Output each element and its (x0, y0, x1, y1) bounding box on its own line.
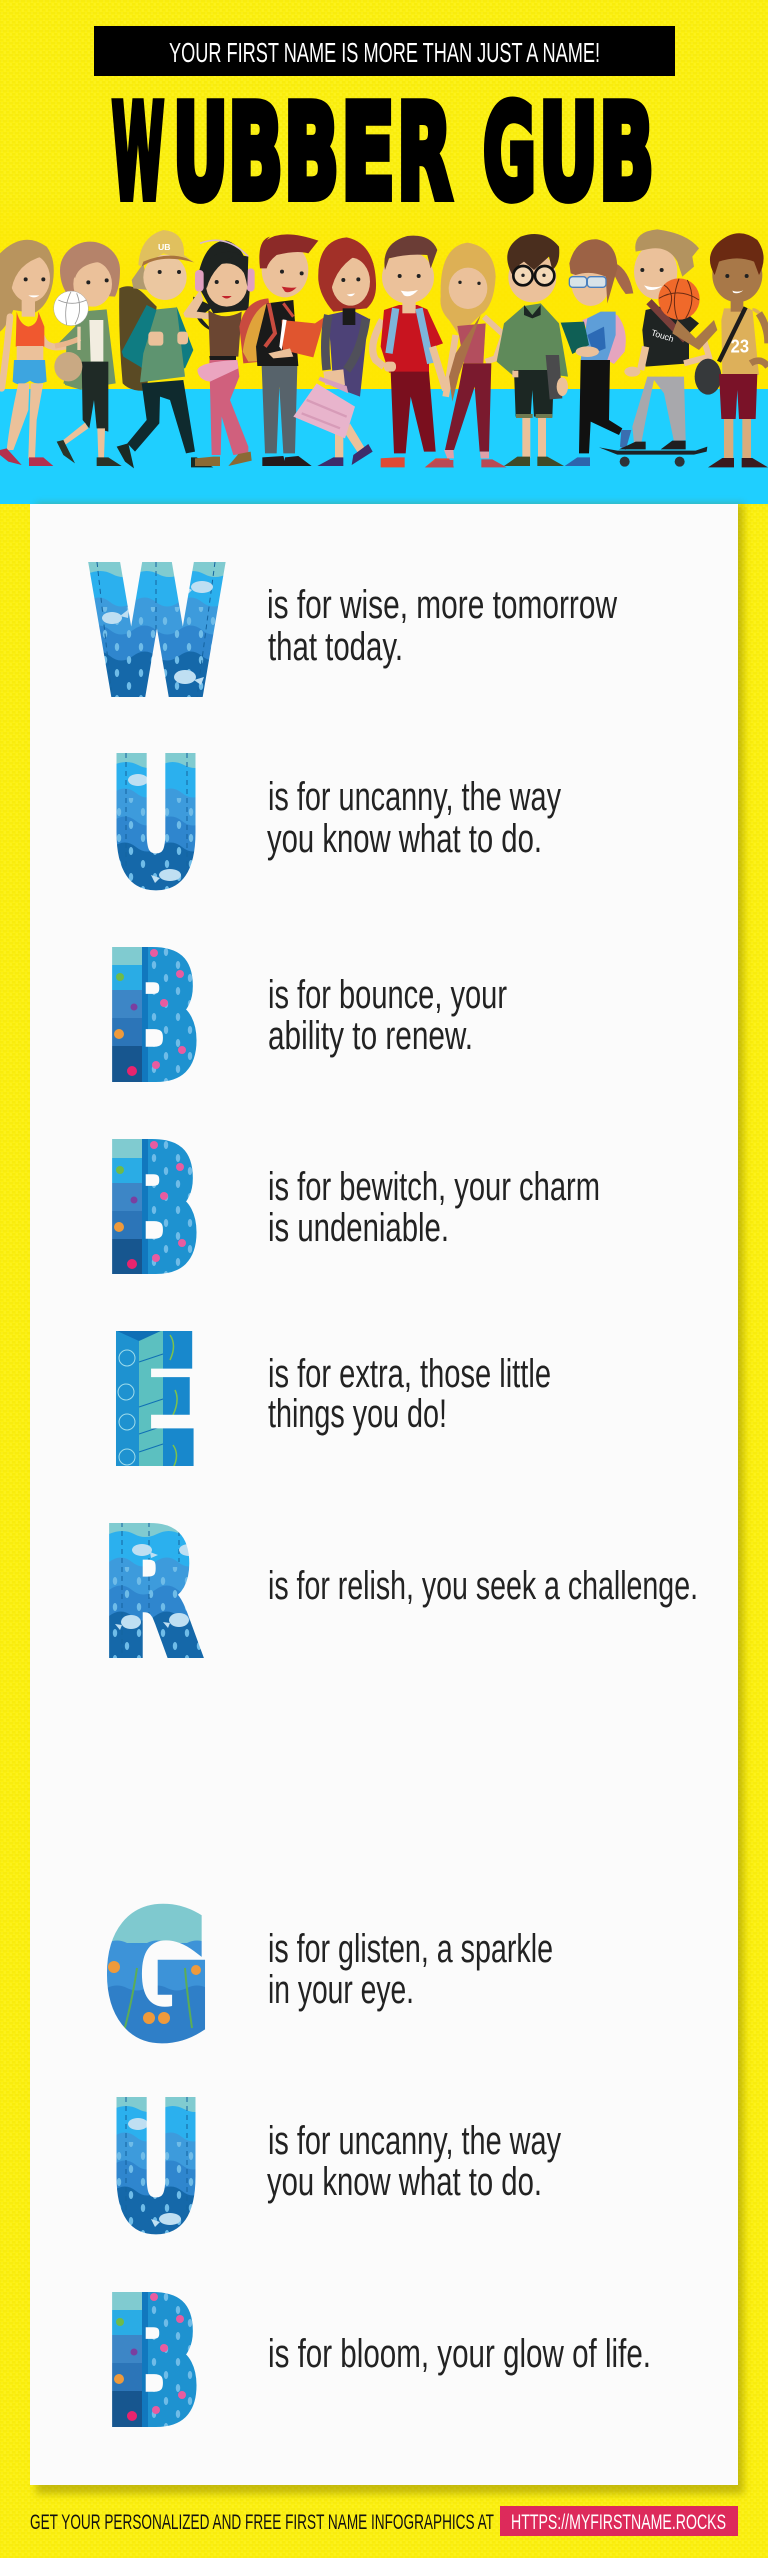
text G: is for glisten, a sparkle (268, 1927, 553, 1971)
letter R (109, 1522, 205, 1662)
row: B (112, 2290, 651, 2430)
text U (267, 775, 561, 861)
text G: in your eye. (268, 1968, 414, 2012)
row: U (113, 753, 561, 893)
text E: things you do! (268, 1392, 447, 1436)
person 7 to 12: Touch (650, 327, 675, 344)
title: R (397, 76, 452, 228)
letter G (107, 1903, 207, 2047)
person 1 to 6 (0, 230, 376, 468)
text W: is for wise, more tomorrow (267, 583, 617, 627)
letter U (116, 753, 196, 890)
person 1 to 6: UB (158, 242, 171, 252)
text U (267, 2119, 561, 2204)
text U: is for uncanny, the way (268, 2119, 561, 2163)
letter B (112, 945, 202, 1085)
row: E (115, 1330, 551, 1470)
person 7 to 12 (373, 229, 768, 467)
text U: you know what to do. (267, 2160, 542, 2204)
letter U (116, 2097, 196, 2234)
title (112, 76, 654, 228)
text B (268, 973, 507, 1058)
letter B (112, 1138, 202, 1278)
text B (268, 1165, 600, 1250)
text U: you know what to do. (267, 817, 542, 861)
row: G (107, 1903, 553, 2047)
text G (268, 1927, 553, 2012)
text E: is for extra, those little (268, 1352, 551, 1396)
row: B (112, 945, 507, 1085)
text W (267, 583, 617, 669)
title: U (173, 76, 228, 228)
title: E (341, 76, 395, 228)
title: U (539, 76, 598, 228)
tagline bar (94, 26, 675, 76)
letter W (87, 562, 227, 698)
title: B (228, 76, 283, 228)
title: B (599, 76, 654, 228)
text E (268, 1352, 551, 1436)
panel shadow (36, 504, 744, 2494)
letter B (112, 2290, 202, 2430)
row: B (112, 1138, 600, 1278)
blue floor band (0, 389, 768, 504)
footer call to action: GET YOUR PERSONALIZED AND FREE FIRST NAME INFOGRAPHICS AT (30, 2511, 494, 2534)
text B: ability to renew. (268, 1014, 473, 1058)
title: G (483, 76, 536, 228)
footer url badge (500, 2506, 738, 2536)
letter E (116, 1331, 194, 1466)
panel: letters (30, 504, 738, 2485)
illustration: group of young people (0, 229, 768, 468)
title: W (112, 76, 164, 228)
row: U (113, 2097, 561, 2237)
text U: is for uncanny, the way (268, 775, 561, 819)
row: W (87, 562, 617, 698)
person 7 to 12: 23 (731, 336, 749, 357)
text B: is for bewitch, your charm (268, 1165, 600, 1209)
text B: is for bounce, your (268, 973, 507, 1017)
title: B (284, 76, 339, 228)
text W: that today. (268, 625, 403, 669)
text B: is undeniable. (268, 1206, 449, 1250)
row: R (109, 1522, 698, 1662)
